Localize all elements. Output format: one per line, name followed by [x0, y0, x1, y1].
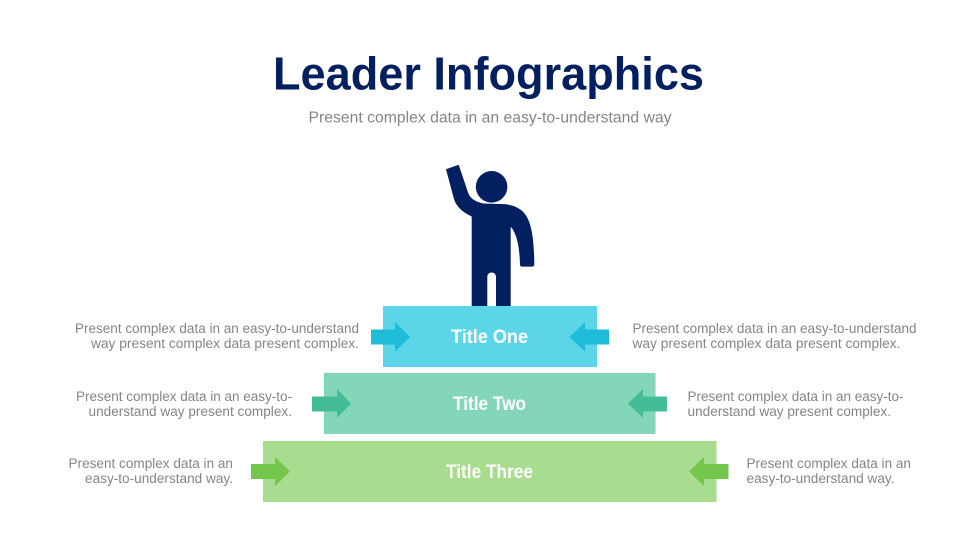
text block: tier three left: Present complex data in an	[68, 456, 233, 471]
text block: tier two right: Present complex data in an easy-to-	[688, 389, 904, 404]
icon: leader figure with raised arm	[446, 165, 534, 306]
text block: tier two right: understand way present complex.	[688, 404, 891, 419]
title: Leader Infographics	[273, 48, 704, 100]
arrow: tier two right	[628, 389, 667, 418]
arrow: tier one right	[570, 322, 609, 352]
text block: tier three right	[746, 456, 911, 486]
text block: tier two right	[688, 389, 904, 419]
arrow: tier three right	[689, 457, 728, 486]
text block: tier three right: easy-to-understand way.	[746, 471, 894, 486]
arrow: tier one left	[371, 322, 410, 352]
text block: tier two left: Present complex data in an easy-to-	[76, 389, 292, 404]
text block: tier one right	[631, 321, 916, 351]
subtitle: Present complex data in an easy-to-understand way	[308, 110, 672, 126]
label: Title Two: Title Two	[453, 394, 526, 415]
label: Title Three: Title Three	[446, 462, 533, 483]
text block: tier one left: way present complex data present complex.	[90, 336, 359, 351]
text block: tier three right: Present complex data in an	[746, 456, 911, 471]
text block: tier two left	[76, 389, 292, 419]
panel: tier three	[263, 441, 716, 502]
text block: tier one left: Present complex data in an easy-to-understand	[75, 321, 359, 336]
panel: tier one	[383, 306, 597, 367]
panel: tier two	[324, 373, 656, 434]
text block: tier one left	[75, 321, 359, 351]
label: Title One: Title One	[451, 327, 528, 348]
text block: tier three left: easy-to-understand way.	[85, 471, 233, 486]
text block: tier three left	[68, 456, 233, 486]
arrow: tier two left	[312, 389, 351, 418]
text block: tier one right: Present complex data in an easy-to-understand	[632, 321, 916, 336]
text block: tier two left: understand way present complex.	[88, 404, 292, 419]
text block: tier one right: way present complex data present complex.	[631, 336, 900, 351]
arrow: tier three left	[251, 457, 290, 486]
